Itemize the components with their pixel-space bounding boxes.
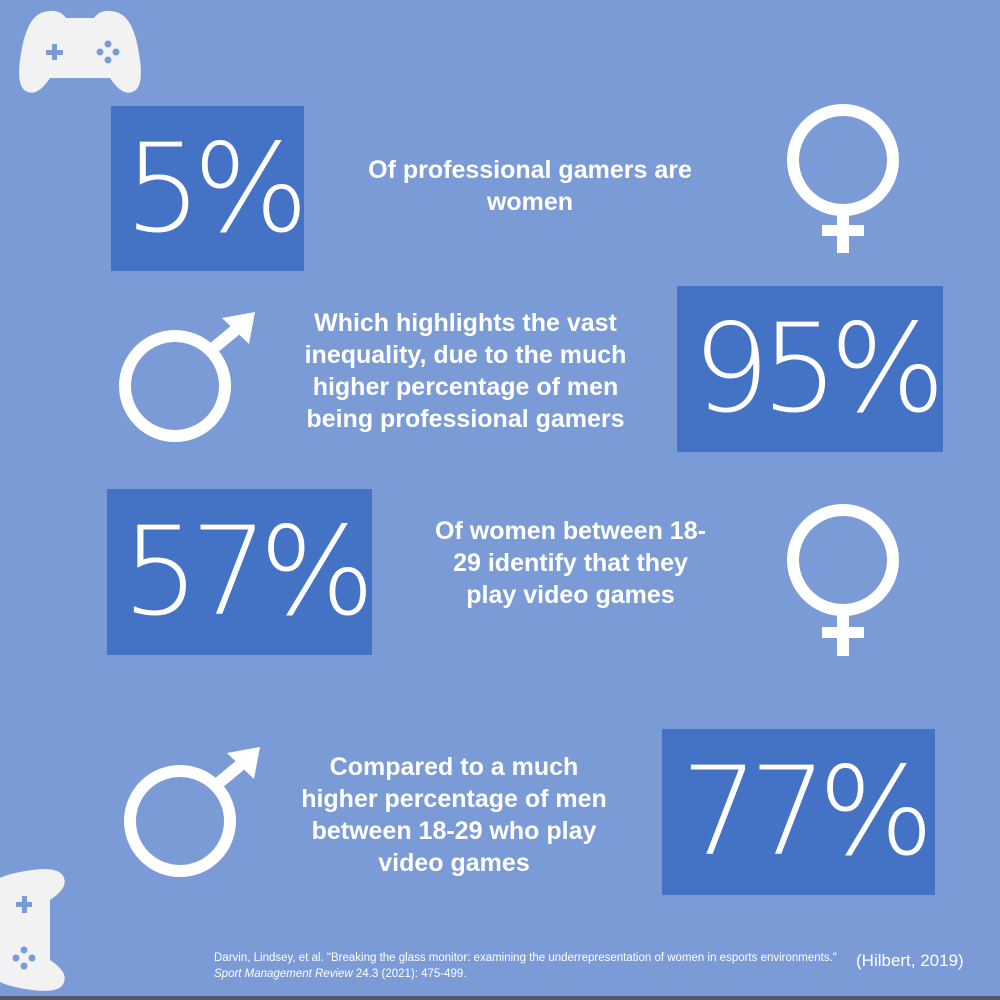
- icon: male symbol 2: [124, 747, 260, 877]
- text: women 18-29: Of women between 18-29 identify that they play video games: [435, 517, 706, 609]
- stat box: 5%: 5%: [124, 118, 300, 260]
- citation: Hilbert: (Hilbert, 2019): [856, 951, 964, 970]
- icon: female symbol 2: [787, 504, 899, 656]
- text: inequality: Which highlights the vast inequality, due to the much higher percentage of men being professional gamers: [305, 309, 626, 433]
- stat box: 77%: 77%: [681, 741, 925, 883]
- icon: game controller bottom: [0, 869, 65, 991]
- icon: game controller top: [19, 10, 141, 93]
- citation: Darvin, Lindsey, et al. "Breaking the glass monitor: examining the underrepresentation of women in esports environments." Sport Management Review 24.3 (2021): 475-499.: [214, 952, 837, 980]
- stat box: 95%: 95%: [692, 298, 937, 440]
- text: men 18-29: higher percentage of men between 18-29 who play video games: [301, 785, 607, 877]
- stat box: 57%: 57%: [122, 501, 366, 643]
- text: men 18-29: Compared to a much: [330, 753, 578, 781]
- text: professional gamers women: Of professional gamers are women: [368, 156, 692, 216]
- icon: female symbol 1: [787, 104, 899, 253]
- icon: male symbol 1: [119, 312, 255, 442]
